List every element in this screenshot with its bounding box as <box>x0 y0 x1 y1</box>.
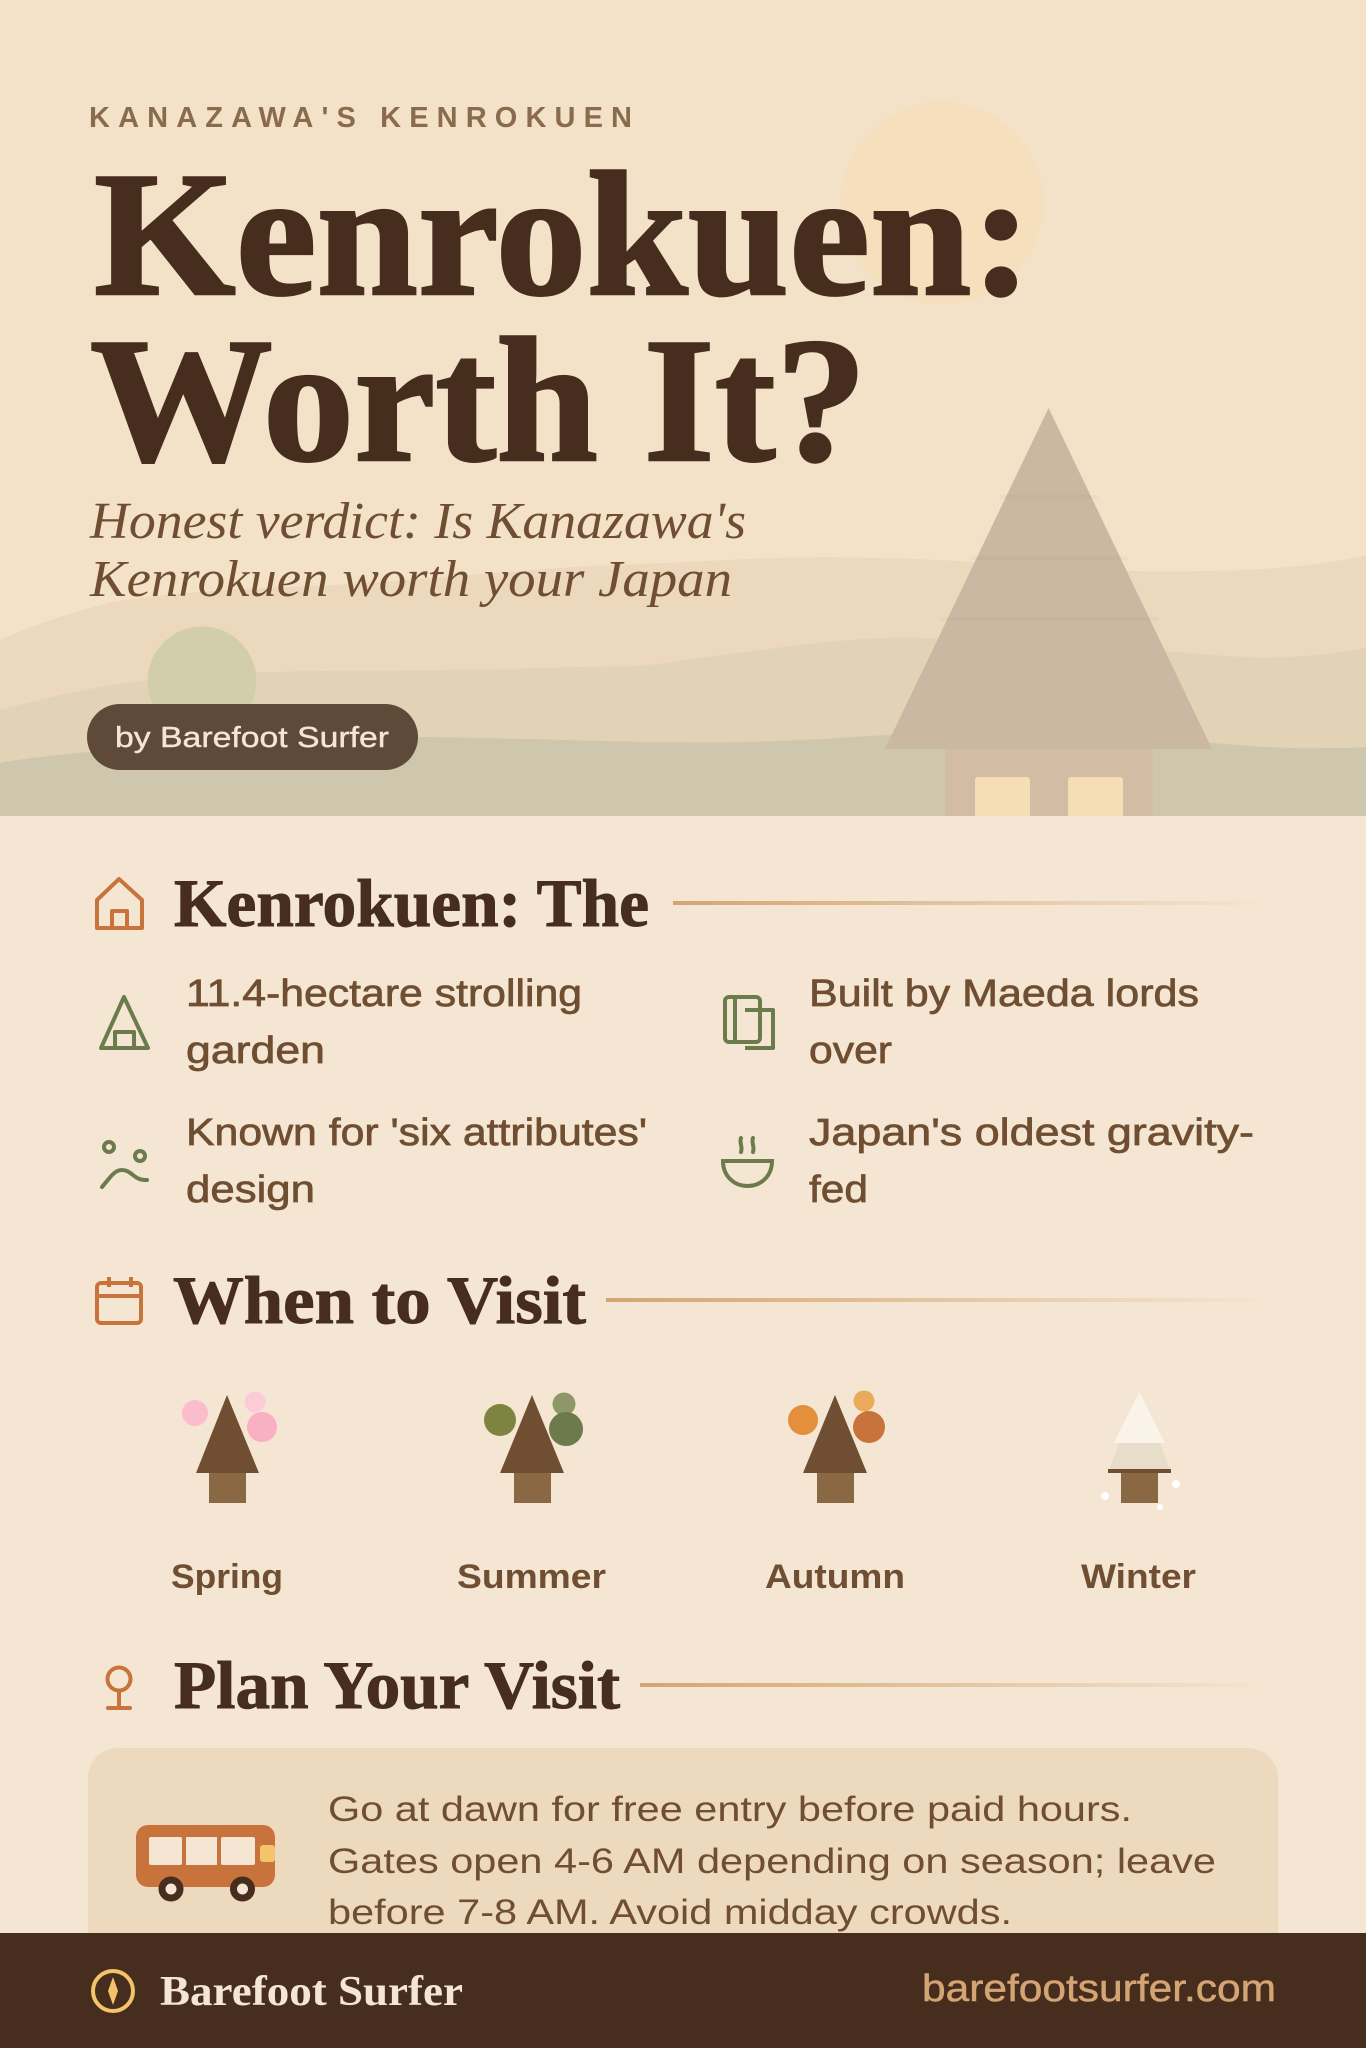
fact: gravity fed: fed <box>809 1169 868 1211</box>
fact: garden size: 11.4-hectare strolling <box>186 973 582 1015</box>
fact: Maeda lords: Built by Maeda lords <box>809 973 1199 1015</box>
season: spring <box>171 1392 283 1596</box>
section: Plan Your Visit <box>88 1647 1278 1988</box>
icon: green tree circle <box>148 626 256 736</box>
fact: Maeda lords <box>725 973 1199 1072</box>
season: summer <box>457 1392 606 1596</box>
heading: Plan Your Visit <box>174 1647 620 1723</box>
season: spring: Spring <box>171 1558 283 1596</box>
subtitle: Kenrokuen worth your Japan <box>89 551 732 608</box>
icon: steaming bowl <box>723 1138 772 1186</box>
house roof <box>885 408 1212 749</box>
icon: book <box>725 997 773 1048</box>
footer brand: Barefoot Surfer <box>160 1969 463 2015</box>
season: autumn: Autumn <box>765 1558 905 1596</box>
icon: map pin <box>108 1668 130 1708</box>
author pill <box>87 704 418 770</box>
title: Kenrokuen: <box>94 135 1032 333</box>
season: winter <box>1081 1392 1196 1596</box>
fact: garden size <box>101 973 582 1072</box>
author pill: by Barefoot Surfer <box>115 722 389 754</box>
panel: hero <box>0 0 1366 816</box>
icon: bus <box>136 1825 275 1898</box>
eyebrow: KANAZAWA'S KENROKUEN <box>89 102 632 134</box>
footer <box>0 1933 1366 2048</box>
roof ridge lines <box>940 495 1158 621</box>
hills: middle layer <box>0 638 1366 816</box>
fact: Maeda lords: over <box>809 1030 892 1072</box>
subtitle <box>89 493 746 608</box>
title <box>90 135 1032 499</box>
tip text <box>328 1790 1216 1932</box>
fact: garden size: garden <box>186 1030 325 1072</box>
fact: gravity fed <box>723 1112 1254 1211</box>
season: summer: Summer <box>457 1558 606 1596</box>
tip card <box>88 1748 1278 1988</box>
section: When to Visit <box>97 1262 1278 1596</box>
section: Kenrokuen facts <box>97 865 1278 1211</box>
fact: six attributes: design <box>186 1169 315 1211</box>
illustration: pagoda house <box>885 408 1212 816</box>
tip text: Go at dawn for free entry before paid hours. <box>328 1790 1132 1829</box>
heading: Kenrokuen: The <box>174 865 649 941</box>
icon: calendar <box>97 1277 141 1323</box>
season: winter: Winter <box>1081 1558 1196 1596</box>
footer url: barefootsurfer.com <box>922 1968 1276 2010</box>
fact: gravity fed: Japan's oldest gravity- <box>809 1112 1254 1154</box>
hero sky <box>0 0 1366 816</box>
subtitle: Honest verdict: Is Kanazawa's <box>89 493 746 550</box>
tip text: before 7-8 AM. Avoid midday crowds. <box>328 1893 1012 1932</box>
heading: When to Visit <box>173 1262 586 1338</box>
icon: compass <box>93 1971 133 2011</box>
icon: tent <box>101 997 148 1048</box>
tip text: Gates open 4-6 AM depending on season; leave <box>328 1842 1216 1881</box>
icon: sun <box>840 102 1044 304</box>
fact: six attributes: Known for 'six attributes' <box>186 1112 647 1154</box>
icon: house <box>97 879 142 928</box>
title: Worth It? <box>90 301 867 499</box>
hills: near layer <box>0 735 1366 816</box>
hills: far layer <box>0 555 1366 816</box>
season: autumn <box>765 1390 905 1596</box>
fact: six attributes <box>102 1112 647 1211</box>
house windows <box>975 777 1123 816</box>
icon: landscape <box>102 1142 147 1187</box>
house body <box>946 749 1152 816</box>
